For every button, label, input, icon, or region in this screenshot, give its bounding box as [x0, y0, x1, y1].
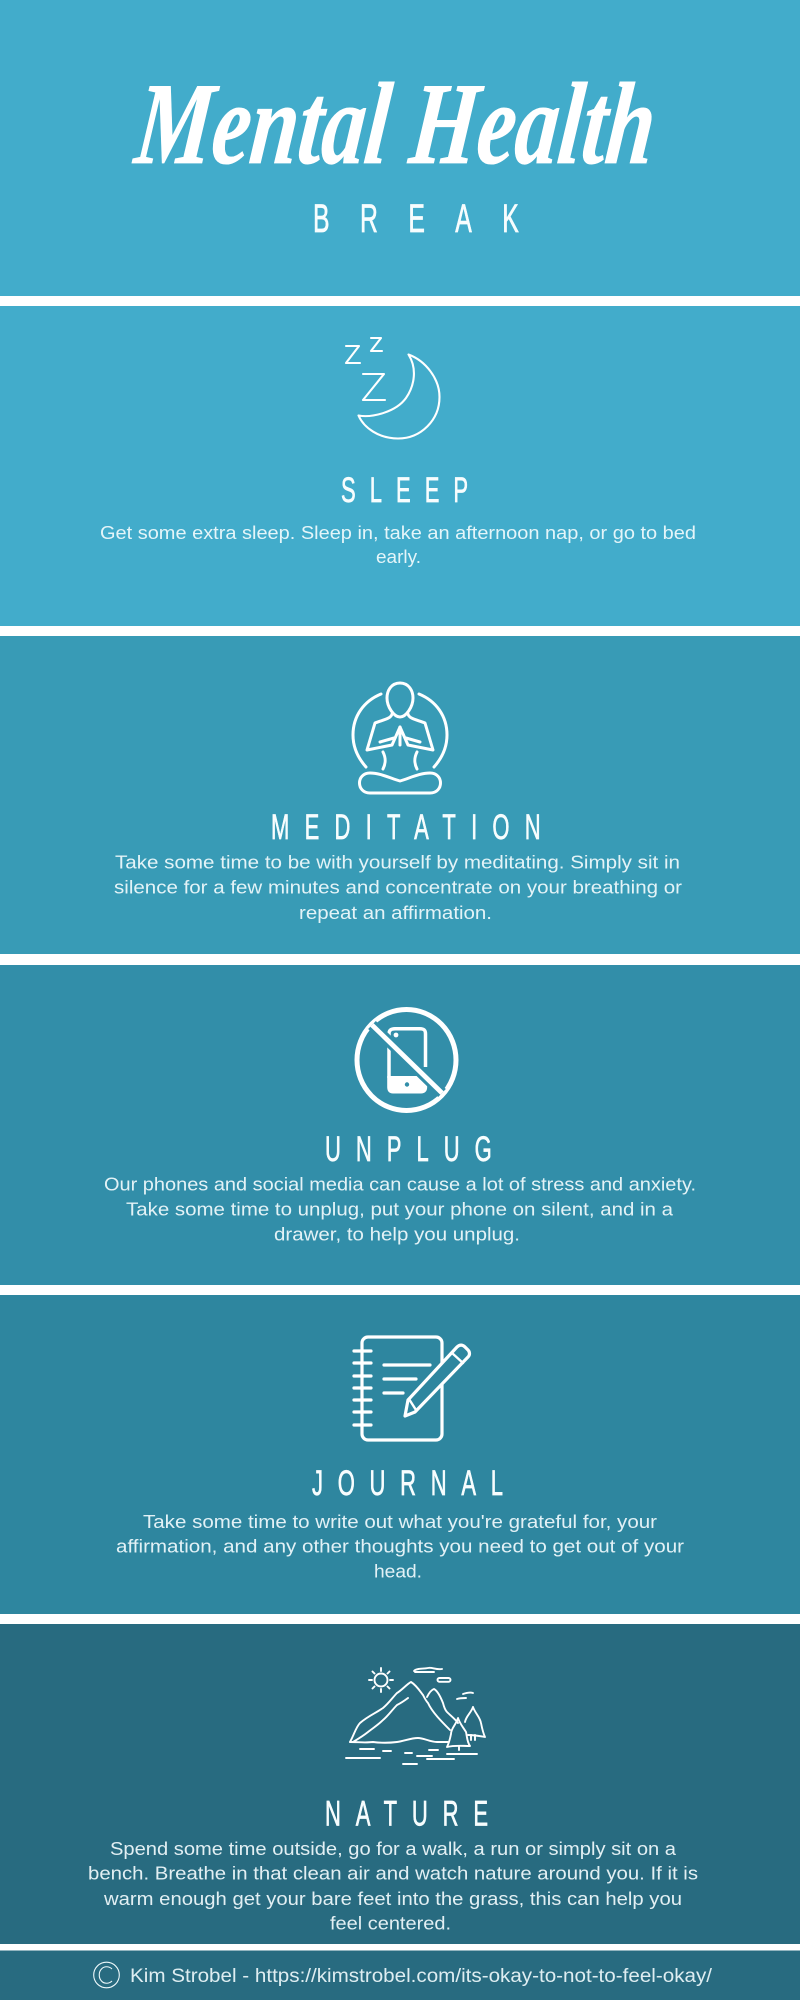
text block: journal [116, 1511, 684, 1582]
icon: mountain landscape [346, 1668, 485, 1764]
panel: meditation [0, 636, 800, 954]
icon: copyright [94, 1962, 119, 1988]
text block: sleep: early. [376, 546, 421, 567]
panel: footer [0, 1950, 800, 2000]
text block: journal: affirmation, and any other thoughts you need to get out of your [116, 1536, 684, 1557]
text block: nature: warm enough get your bare feet into the grass, this can help you [103, 1888, 682, 1909]
heading: sleep: SLEEP [341, 471, 468, 510]
panel: journal [0, 1295, 800, 1614]
text block: unplug: Take some time to unplug, put your phone on silent, and in a [126, 1198, 674, 1219]
text block: journal: Take some time to write out what you're grateful for, your [143, 1511, 657, 1532]
panel: unplug [0, 965, 800, 1285]
icon: moon with Z's [346, 338, 440, 438]
text block: sleep [100, 522, 696, 567]
panel: nature [0, 1624, 800, 1944]
heading: unplug: UNPLUG [325, 1130, 492, 1169]
text block: meditation: silence for a few minutes and concentrate on your breathing or [114, 877, 682, 898]
heading: meditation: MEDITATION [271, 808, 541, 847]
heading: journal: JOURNAL [312, 1464, 503, 1503]
icon: meditating figure [353, 683, 447, 793]
heading: nature: NATURE [325, 1794, 488, 1834]
panel: sleep [0, 306, 800, 626]
text block: nature: bench. Breathe in that clean air and watch nature around you. If it is [88, 1863, 698, 1884]
text block: meditation [114, 852, 682, 923]
text block: meditation: Take some time to be with yourself by meditating. Simply sit in [115, 852, 680, 872]
icon: notebook and pencil [354, 1337, 470, 1440]
icon: crossed-out phone [357, 1010, 456, 1110]
text block: nature [88, 1838, 698, 1934]
text block: meditation: repeat an affirmation. [299, 902, 492, 923]
text block: unplug [104, 1174, 696, 1245]
text block: journal: head. [374, 1560, 422, 1582]
text block: nature: Spend some time outside, go for a walk, a run or simply sit on a [110, 1838, 677, 1859]
panel: title header [0, 0, 800, 296]
text block: nature: feel centered. [330, 1913, 451, 1934]
text block: sleep: Get some extra sleep. Sleep in, take an afternoon nap, or go to bed [100, 522, 696, 543]
text block: unplug: Our phones and social media can cause a lot of stress and anxiety. [104, 1174, 696, 1195]
subtitle: BREAK [313, 197, 519, 242]
text block: unplug: drawer, to help you unplug. [274, 1224, 520, 1245]
footer credit: Kim Strobel - https://kimstrobel.com/its-okay-to-not-to-feel-okay/ [130, 1966, 713, 1987]
